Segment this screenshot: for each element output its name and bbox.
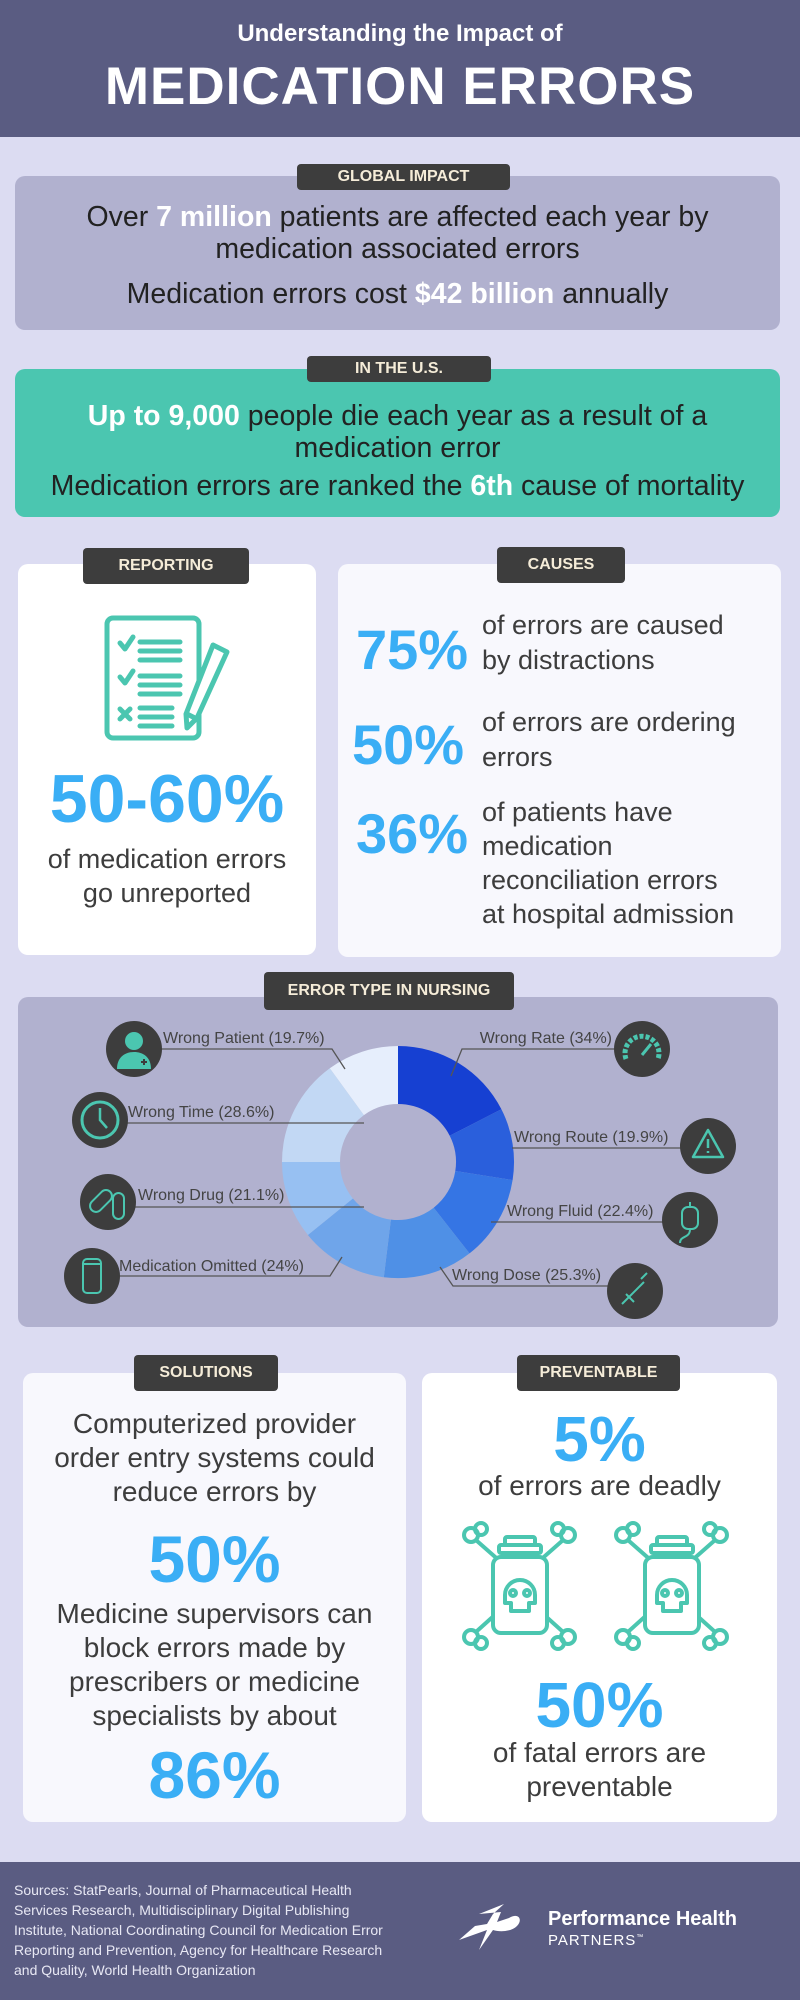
header [0, 0, 800, 137]
panel: global impact [15, 176, 780, 330]
tab: global impact: GLOBAL IMPACT [338, 168, 469, 185]
label: wrong drug: Wrong Drug (21.1%) [138, 1187, 284, 1204]
text: CPOE: Computerized provider [73, 1408, 356, 1439]
text: sources: Institute, National Coordinating Council for Medication Error [14, 1922, 383, 1938]
text: supervisors [57, 1598, 372, 1731]
tab: in the US [307, 356, 491, 382]
panel: causes [338, 564, 781, 957]
text: 9000 deaths: Up to 9,000 people die each year as a result of a [88, 400, 707, 432]
text: sources: Reporting and Prevention, Agency for Healthcare Research [14, 1942, 382, 1958]
tab: reporting [83, 548, 249, 584]
text: supervisors: prescribers or medicine [69, 1666, 360, 1697]
text: unreported [48, 844, 286, 908]
tab: preventable [517, 1355, 680, 1391]
logo [459, 1904, 737, 1950]
tab: error type in nursing: ERROR TYPE IN NURSING [288, 982, 490, 999]
panel: in the US: medication error [295, 432, 500, 464]
tab: solutions [134, 1355, 278, 1391]
tab: reporting: REPORTING [118, 557, 214, 574]
label: wrong rate [480, 1021, 670, 1077]
label: wrong patient [106, 1021, 325, 1077]
tab: causes [497, 547, 625, 583]
tab: in the US: IN THE U.S. [355, 360, 443, 377]
panel: causes: of patients have [482, 797, 673, 827]
logo: Performance Health [548, 1908, 737, 1930]
chart: nursing donut [64, 1021, 736, 1319]
label: wrong time [72, 1092, 274, 1148]
panel: causes: reconciliation errors [482, 865, 718, 895]
panel: causes: errors [482, 742, 553, 772]
title line 1: Understanding the Impact of [237, 20, 563, 47]
text: supervisors: specialists by about [92, 1700, 337, 1731]
text: 42 billion: Medication errors cost $42 billion annually [127, 278, 668, 310]
text: supervisors: block errors made by [84, 1632, 345, 1663]
text: unreported: of medication errors [48, 844, 286, 874]
stat: 50%: 50% [148, 1522, 281, 1596]
panel: causes: of errors are ordering [482, 707, 736, 737]
stat: 75%: 75% [356, 618, 468, 681]
text: CPOE [54, 1408, 375, 1507]
text: unreported: go unreported [83, 878, 251, 908]
stat: 50-60%: 50-60% [50, 761, 284, 837]
text: CPOE: order entry systems could [54, 1442, 375, 1473]
text: preventable [493, 1737, 706, 1802]
label: wrong drug [80, 1174, 284, 1230]
label: wrong route: Wrong Route (19.9%) [514, 1129, 668, 1146]
panel: error type in nursing [18, 997, 778, 1327]
label: wrong time: Wrong Time (28.6%) [128, 1104, 274, 1121]
panel: causes: at hospital admission [482, 899, 734, 929]
label: wrong fluid: Wrong Fluid (22.4%) [507, 1203, 653, 1220]
tab: error type in nursing [264, 972, 514, 1010]
label: wrong patient: Wrong Patient (19.7%) [163, 1030, 325, 1047]
stat: 36%: 36% [356, 802, 468, 865]
text: 7 million: Over 7 million patients are affected each year by [86, 201, 709, 233]
text: sources: Sources: StatPearls, Journal of Pharmaceutical Health [14, 1882, 352, 1898]
title line 2: MEDICATION ERRORS [105, 57, 695, 116]
text: sources [14, 1882, 383, 1978]
tab: solutions: SOLUTIONS [159, 1364, 253, 1381]
label: wrong route [514, 1118, 736, 1174]
stat: 50%: 50% [535, 1669, 664, 1741]
panel: reporting [18, 564, 316, 955]
text: 6th cause: Medication errors are ranked the 6th cause of mortality [51, 470, 744, 502]
stat: 86%: 86% [148, 1738, 281, 1812]
logo: PARTNERS™ [548, 1932, 644, 1949]
text: preventable: preventable [526, 1771, 673, 1802]
text: deadly: of errors are deadly [478, 1470, 721, 1501]
label: medication omitted: Medication Omitted (24%) [119, 1258, 304, 1275]
text: supervisors: Medicine supervisors can [57, 1598, 372, 1629]
text: sources: Services Research, Multidisciplinary Digital Publishing [14, 1902, 349, 1918]
panel: causes: of errors are caused [482, 610, 724, 640]
panel: preventable [422, 1373, 777, 1822]
tab: causes: CAUSES [528, 556, 594, 573]
tab: preventable: PREVENTABLE [540, 1364, 657, 1381]
text: preventable: of fatal errors are [493, 1737, 706, 1768]
stat: 5%: 5% [553, 1403, 646, 1475]
label: wrong rate: Wrong Rate (34%) [480, 1030, 612, 1047]
panel: global impact: medication associated errors [215, 233, 580, 265]
label: medication omitted [64, 1248, 304, 1304]
icon: poison bottles [462, 1521, 729, 1651]
panel: in the US [15, 369, 780, 517]
label: wrong dose [452, 1263, 663, 1319]
panel: causes: by distractions [482, 645, 655, 675]
panel: solutions [23, 1373, 406, 1822]
stat: 50%: 50% [352, 713, 464, 776]
text: CPOE: reduce errors by [113, 1476, 316, 1507]
text: sources: and Quality, World Health Organization [14, 1962, 256, 1978]
label: wrong fluid [507, 1192, 718, 1248]
label: wrong dose: Wrong Dose (25.3%) [452, 1267, 601, 1284]
tab: global impact [297, 164, 510, 190]
footer [0, 1862, 800, 2000]
panel: causes: medication [482, 831, 613, 861]
icon: clipboard checklist [104, 616, 230, 740]
